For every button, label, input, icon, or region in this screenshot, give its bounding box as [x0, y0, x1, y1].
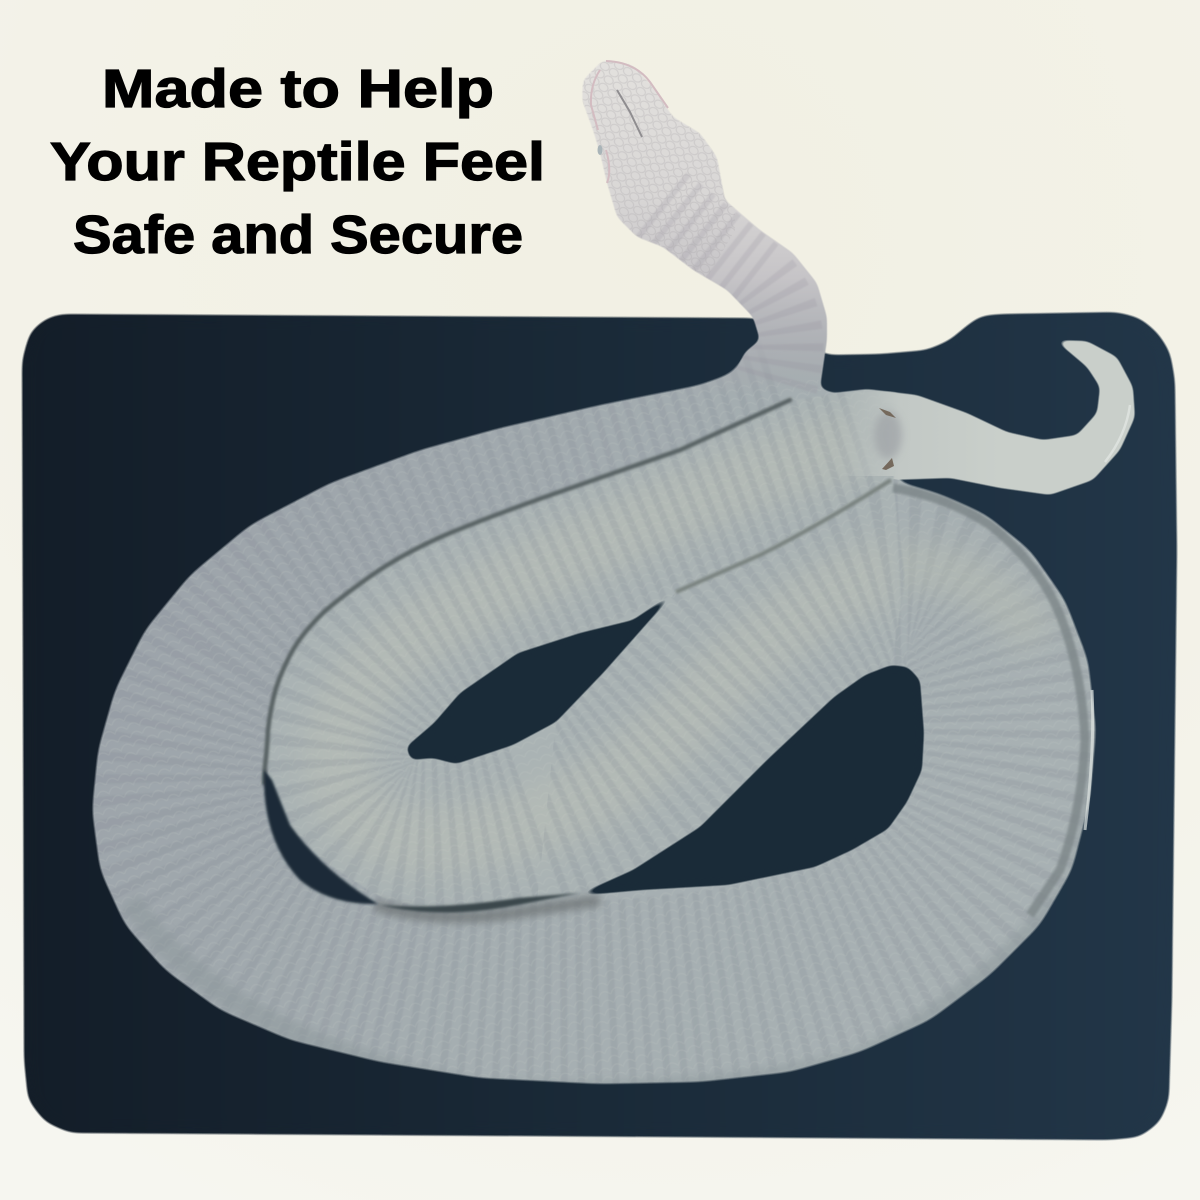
vent spur: lower — [882, 458, 894, 470]
inner coil scale lattice — [250, 380, 930, 920]
outer coil scale bands: main run — [628, 547, 1091, 1070]
glossy rim highlight — [1085, 690, 1093, 830]
inner coil scale bands: diagonal — [535, 570, 930, 820]
vent spur: upper — [879, 408, 896, 418]
gap hole: lower right — [575, 665, 924, 896]
tail details — [874, 405, 1130, 470]
title line 1: Made to Help — [102, 59, 494, 119]
top coil highlight — [904, 550, 1038, 633]
head scale texture — [582, 62, 735, 276]
gap crescent: lower left — [264, 770, 378, 904]
tail gloss — [1105, 405, 1130, 462]
black silicone tray — [22, 312, 1177, 1140]
crease: outer rim near tail — [893, 488, 1085, 915]
head pink lip line — [591, 61, 668, 183]
inner coil highlight — [336, 440, 895, 840]
inner coil — [268, 391, 904, 906]
outer coil scale lattice — [60, 380, 1160, 1100]
inner coil base — [268, 407, 900, 906]
tail tone — [859, 340, 1135, 495]
title line 3: Safe and Secure — [73, 205, 523, 265]
inner coil scale bands: upper arm and loop — [336, 440, 860, 840]
crease: vent to inner hole — [676, 480, 891, 592]
tail tone over vent — [856, 392, 903, 476]
eye — [598, 145, 602, 155]
base fill — [92, 304, 1096, 1084]
neck scale bands — [660, 205, 782, 385]
gap sliver: inner coil bottom — [380, 893, 580, 912]
outer edge shading — [130, 730, 1106, 1092]
title line 2: Your Reptile Feel — [50, 132, 545, 192]
crease: inner coil bottom shadow — [375, 900, 600, 917]
head midline groove — [617, 90, 642, 137]
crease: outer coil and inner coil — [264, 400, 790, 783]
tail vent shade — [874, 411, 902, 459]
title — [50, 59, 545, 265]
outer coil scale bands: upper left run — [217, 385, 775, 655]
neck and head tone — [582, 60, 827, 362]
gap hole: upper left — [406, 588, 680, 764]
